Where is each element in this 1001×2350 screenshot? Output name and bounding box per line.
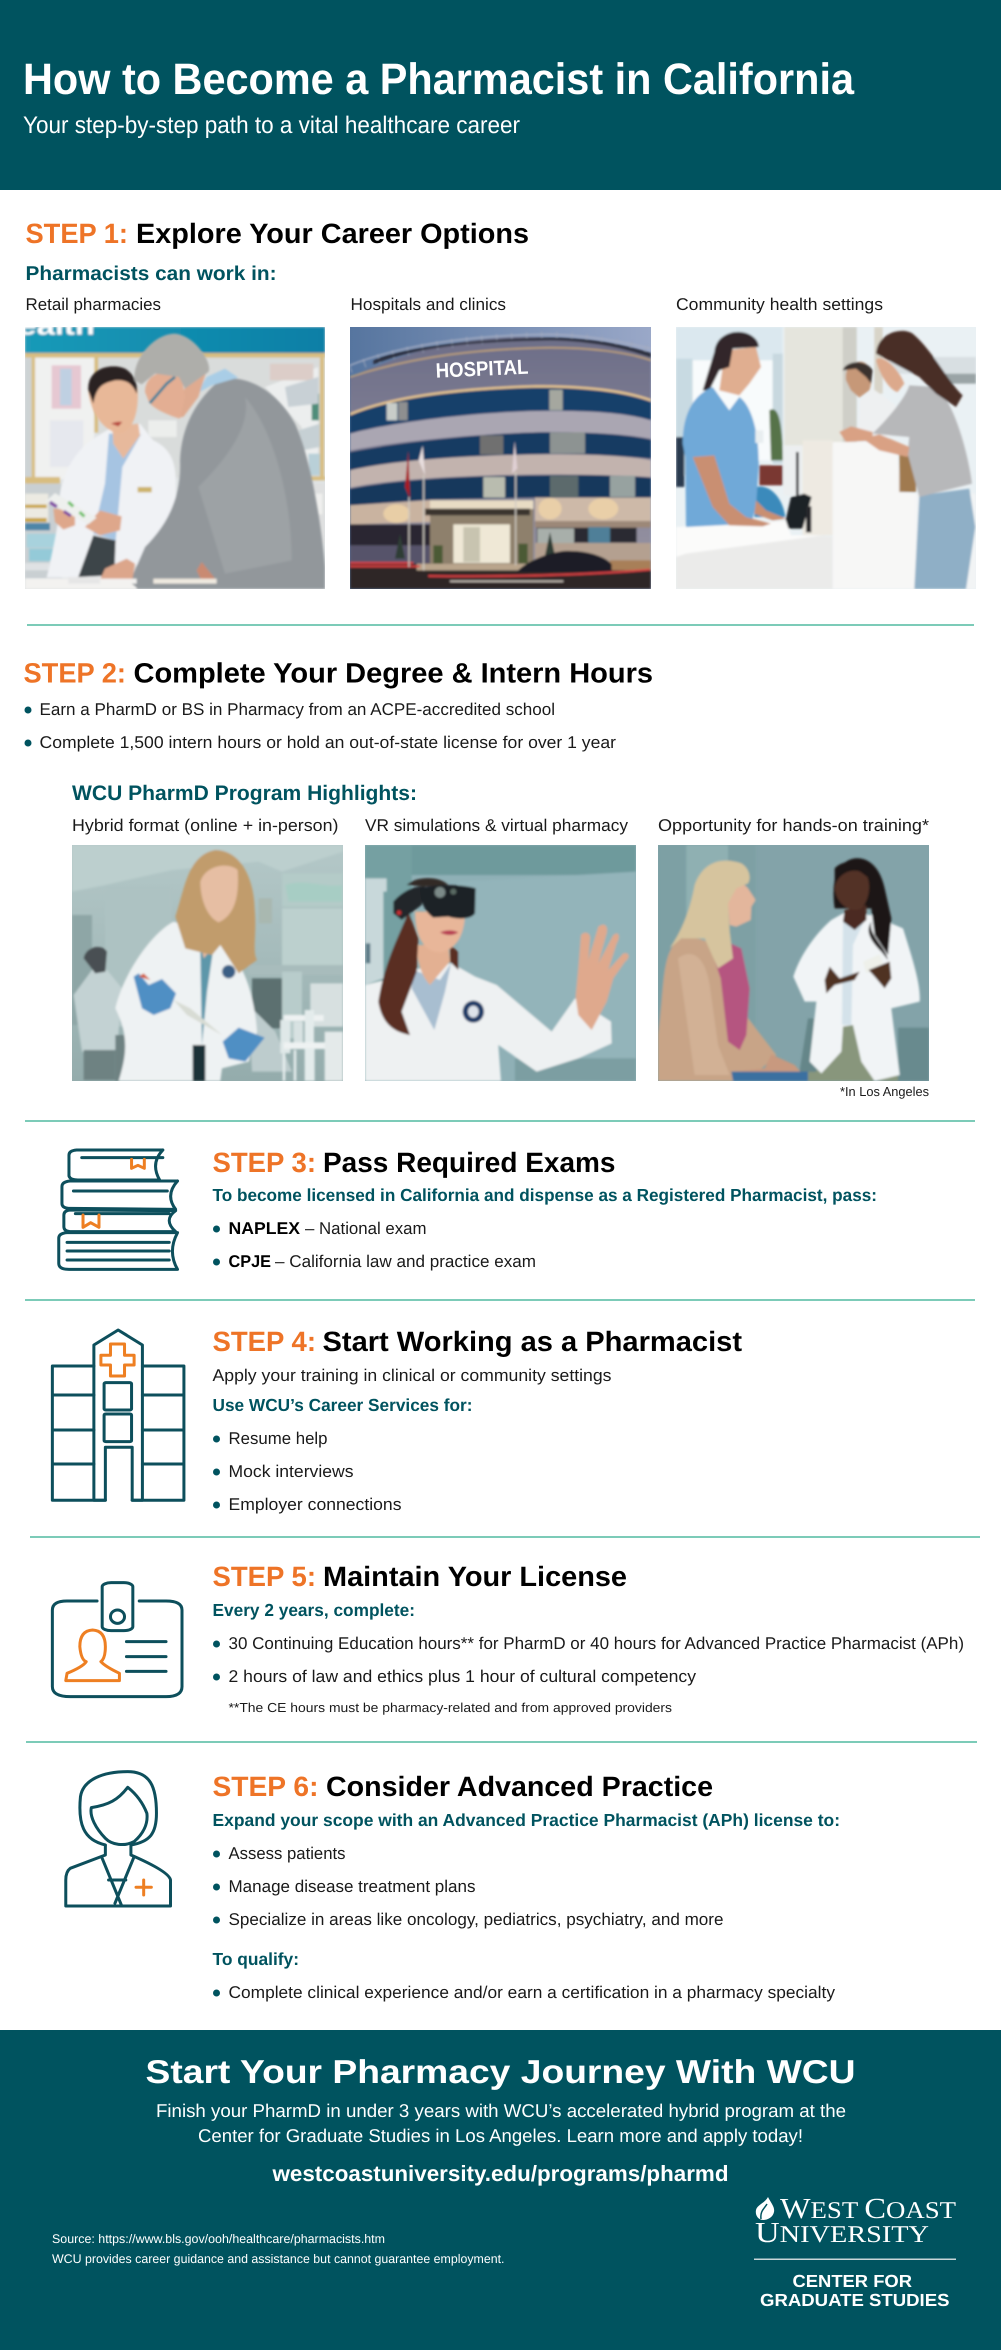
panel: step 6 advanced practice <box>66 1771 840 2002</box>
step 2 heading: STEP 2: <box>24 658 126 688</box>
photo: retail pharmacy <box>18 311 325 589</box>
footer description: Finish your PharmD in under 3 years with WCU’s accelerated hybrid program at the <box>156 2100 846 2121</box>
requirements list: 30 Continuing Education hours** for PharmD or 40 hours for Advanced Practice Pharmacist (APh) <box>228 1634 964 1653</box>
scope list: Assess patients <box>228 1844 346 1863</box>
program URL: westcoastuniversity.edu/programs/pharmd <box>271 2161 728 2186</box>
career services list: Employer connections <box>228 1495 402 1514</box>
source notes <box>52 2232 504 2266</box>
subheading: Pharmacists can work in: <box>26 263 276 285</box>
step 4 heading: Start Working as a Pharmacist <box>322 1326 742 1357</box>
icon: pharmacist portrait <box>66 1772 171 1906</box>
photo: lab student with pipette <box>72 845 343 1081</box>
panel: step 1 career options <box>18 218 976 589</box>
step 5 heading: STEP 5: <box>212 1561 316 1592</box>
header banner <box>0 0 1001 190</box>
man behind counter <box>859 389 896 440</box>
step 1 heading: Explore Your Career Options <box>136 218 529 249</box>
label: hybrid format: Hybrid format (online + in-person) <box>72 816 338 835</box>
logo line: Center for: CENTER FOR <box>792 2271 912 2291</box>
divider <box>25 1299 975 1301</box>
label: hospitals and clinics: Hospitals and clinics <box>350 295 506 314</box>
icon: stack of books <box>59 1150 178 1269</box>
footer call to action <box>0 2030 1001 2350</box>
footer description <box>156 2100 846 2146</box>
career services list <box>213 1429 402 1514</box>
exam list: CPJE <box>228 1252 271 1271</box>
subheading: To become licensed in California and dispense as a Registered Pharmacist, pass: <box>212 1185 877 1205</box>
step 4 heading: STEP 4: <box>212 1326 316 1357</box>
panel: step 3 exams <box>59 1147 877 1271</box>
footer description: Center for Graduate Studies in Los Angeles. Learn more and apply today! <box>198 2125 803 2146</box>
background person <box>74 970 122 1052</box>
exam list: – California law and practice exam <box>275 1252 536 1271</box>
panel: step 4 working <box>52 1326 742 1514</box>
subheading: Every 2 years, complete: <box>212 1600 415 1620</box>
career services list: Resume help <box>228 1429 328 1448</box>
photo: pharmacist talking with patient <box>658 845 929 1081</box>
logo line: Graduate Studies: GRADUATE STUDIES <box>760 2290 950 2310</box>
label: VR simulations: VR simulations & virtual pharmacy <box>365 816 629 835</box>
photo: hospital building: HOSPITAL <box>435 355 529 382</box>
qualification item: Complete clinical experience and/or earn a certification in a pharmacy specialty <box>228 1983 835 2002</box>
subheading: to qualify: To qualify: <box>212 1949 299 1969</box>
bullet list <box>24 700 616 752</box>
source notes: WCU provides career guidance and assistance but cannot guarantee employment. <box>52 2252 504 2266</box>
icon: flame <box>756 2197 774 2220</box>
nurse <box>719 347 761 395</box>
step 2 heading: Complete Your Degree & Intern Hours <box>134 658 653 688</box>
step 6 heading: Consider Advanced Practice <box>326 1771 713 1802</box>
step 6 heading: STEP 6: <box>212 1771 318 1802</box>
description: Apply your training in clinical or community settings <box>212 1366 612 1385</box>
icon: hospital building <box>52 1330 184 1500</box>
exam list: – National exam <box>305 1219 426 1238</box>
program highlights heading: WCU PharmD Program Highlights: <box>72 782 417 805</box>
source notes: Source: https://www.bls.gov/ooh/healthcare/pharmacists.htm <box>52 2232 385 2246</box>
scope list: Specialize in areas like oncology, pediatrics, psychiatry, and more <box>228 1910 724 1929</box>
step 3 heading: STEP 3: <box>212 1147 316 1178</box>
patient hair and face <box>726 881 756 927</box>
step 3 heading: Pass Required Exams <box>323 1147 616 1178</box>
label: hands-on training: Opportunity for hands-on training* <box>658 816 929 835</box>
logo wordmark: West Coast: WEST COAST <box>780 2193 956 2225</box>
divider <box>30 1536 980 1538</box>
footnote: in Los Angeles: *In Los Angeles <box>840 1084 929 1099</box>
photo: community health reception <box>676 327 976 589</box>
woman patient <box>914 489 975 589</box>
label: community health settings: Community health settings <box>676 295 883 314</box>
step 1 heading: STEP 1: <box>26 218 128 249</box>
exam list <box>213 1219 536 1271</box>
career services list: Mock interviews <box>228 1462 354 1481</box>
doctor <box>811 1025 871 1081</box>
label: retail pharmacies: Retail pharmacies <box>26 295 161 314</box>
photo: hospital building <box>350 327 651 589</box>
footnote: CE hours: **The CE hours must be pharmacy-related and from approved providers <box>228 1700 673 1715</box>
icon: ID badge <box>52 1583 182 1697</box>
subheading: Expand your scope with an Advanced Practice Pharmacist (APh) license to: <box>212 1810 840 1830</box>
panel: step 2 degree and intern hours <box>24 658 929 1099</box>
photo: retail pharmacy: ealth <box>18 311 95 340</box>
divider <box>25 1120 975 1122</box>
exam list: NAPLEX <box>228 1219 301 1238</box>
subheading: Use WCU’s Career Services for: <box>212 1395 472 1415</box>
title: How to Become a Pharmacist in California <box>23 55 854 104</box>
bullet list: Earn a PharmD or BS in Pharmacy from an ACPE-accredited school <box>40 700 555 719</box>
patient cardigan <box>658 938 776 1081</box>
photo: VR headset student <box>365 845 636 1081</box>
footer heading: Start Your Pharmacy Journey With WCU <box>146 2053 856 2090</box>
requirements list <box>213 1634 964 1686</box>
bullet list: Complete 1,500 intern hours or hold an out-of-state license for over 1 year <box>40 733 616 752</box>
panel: step 5 license <box>52 1561 964 1715</box>
divider <box>26 1741 977 1743</box>
subtitle: Your step-by-step path to a vital healthcare career <box>23 112 520 139</box>
divider <box>27 624 974 626</box>
scope list <box>213 1844 724 1929</box>
logo wordmark: University: UNIVERSITY <box>755 2217 929 2249</box>
step 5 heading: Maintain Your License <box>323 1561 627 1592</box>
university logo <box>754 2193 956 2310</box>
requirements list: 2 hours of law and ethics plus 1 hour of cultural competency <box>228 1667 697 1686</box>
scope list: Manage disease treatment plans <box>228 1877 476 1896</box>
